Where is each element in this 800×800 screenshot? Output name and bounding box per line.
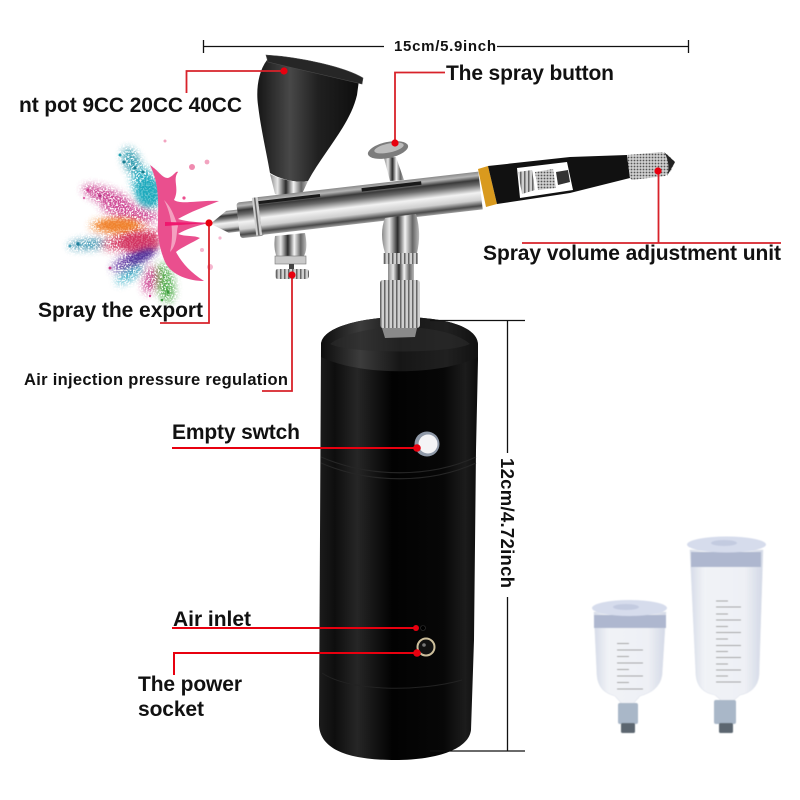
callout: power switch: Empty swtch — [172, 421, 300, 444]
callout: power socket: The power — [138, 673, 242, 696]
paint pot — [257, 55, 363, 197]
gold band — [478, 166, 497, 207]
callout: spray export — [38, 219, 213, 323]
tank body — [319, 317, 478, 760]
air inlet hole — [420, 626, 426, 630]
grip window — [517, 162, 573, 198]
callout: spray volume adjustment: Spray volume adjustment unit — [483, 242, 781, 265]
dimension: height 12cm/4.72inch: 12cm/4.72inch — [497, 458, 518, 588]
barrel assembly — [208, 172, 483, 242]
dimension: width 15cm/5.9inch — [203, 38, 688, 55]
callout: spray volume adjustment — [483, 167, 781, 265]
large cup — [687, 536, 766, 733]
pot collar — [270, 174, 308, 197]
callout: spray export: Spray the export — [38, 299, 203, 322]
pot lid — [266, 55, 363, 84]
small cup — [592, 600, 667, 733]
airbrush gun — [208, 138, 675, 281]
support stem — [382, 214, 419, 281]
pink splash petals — [150, 165, 219, 281]
dimension: height 12cm/4.72inch — [430, 320, 525, 751]
powder core — [136, 179, 160, 207]
callout: air inlet: Air inlet — [173, 608, 251, 631]
paint droplets — [68, 140, 222, 301]
callout: air inlet — [172, 608, 419, 631]
knurled end cap — [627, 152, 675, 180]
tank cap shading — [321, 317, 478, 371]
needle nozzle — [209, 210, 240, 235]
callout: paint pot — [19, 67, 288, 117]
power button — [414, 432, 440, 456]
callout: power switch — [172, 421, 421, 452]
callout: spray button — [391, 62, 614, 147]
pressure knob — [274, 233, 309, 279]
barrel — [258, 172, 483, 235]
callout: paint pot: nt pot 9CC 20CC 40CC — [19, 94, 242, 117]
powder cloud — [68, 145, 178, 304]
spray button — [366, 138, 410, 181]
adjustment screw — [518, 170, 535, 194]
dimension: width 15cm/5.9inch: 15cm/5.9inch — [394, 38, 496, 55]
callout: air pressure regulation: Air injection pressure regulation — [24, 371, 288, 389]
spare paint cups — [592, 536, 766, 733]
paint splash — [68, 140, 222, 304]
air compressor tank — [319, 317, 478, 760]
pot body — [257, 60, 359, 182]
power socket — [418, 638, 434, 656]
callout: power socket — [138, 649, 421, 721]
black grip — [488, 155, 630, 204]
knurled air connector — [380, 280, 420, 338]
callout: air pressure regulation — [24, 271, 296, 391]
barrel head — [236, 200, 264, 238]
callout: spray button: The spray button — [446, 62, 614, 85]
callout: power socket: socket — [138, 698, 204, 721]
